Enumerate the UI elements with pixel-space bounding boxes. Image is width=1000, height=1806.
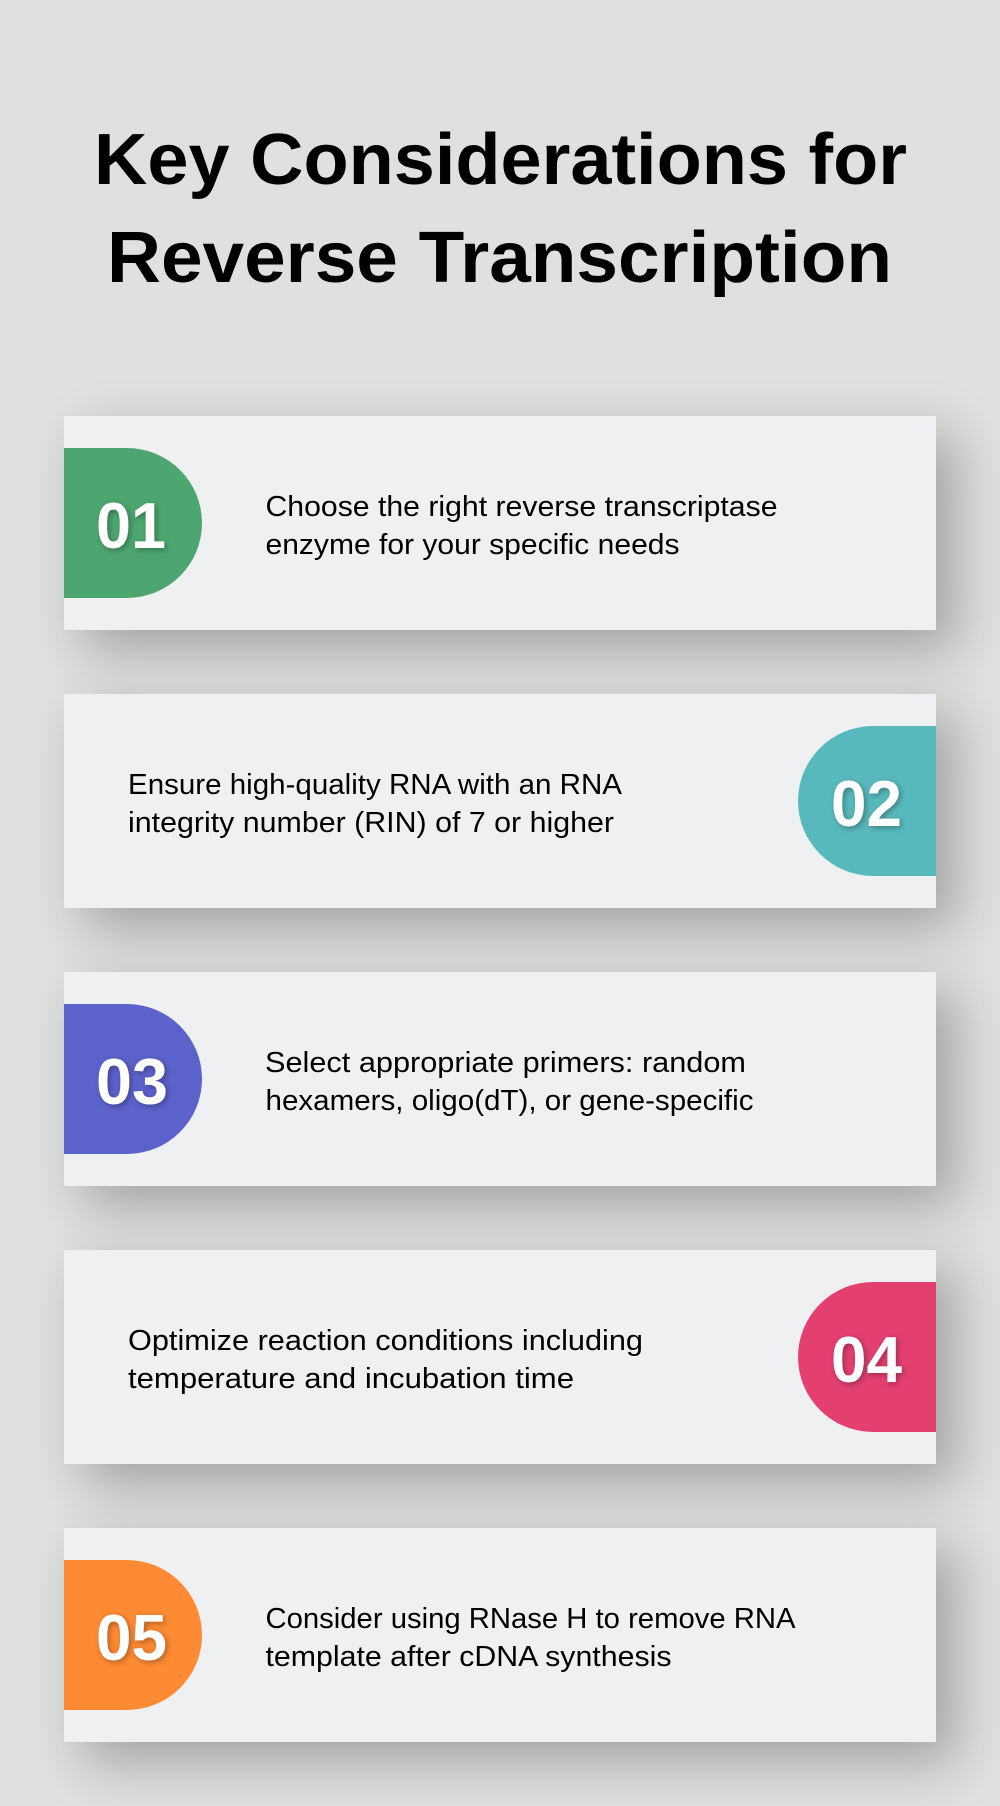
number 05: 05	[96, 1601, 167, 1674]
badge: 01	[64, 448, 202, 598]
badge: 05	[64, 1560, 202, 1710]
panel: step 04	[64, 1250, 936, 1464]
number 02: 02	[831, 767, 902, 840]
title: Key Considerations for	[94, 120, 907, 200]
badge: 02	[798, 726, 936, 876]
badge: 03	[64, 1004, 202, 1154]
text: step 01: enzyme for your specific needs	[266, 529, 680, 561]
text: step 05: Consider using RNase H to remove RNA	[266, 1603, 796, 1635]
badge: 04	[798, 1282, 936, 1432]
text: step 03	[265, 1047, 754, 1117]
panel: step 01	[64, 416, 936, 630]
text: step 05	[266, 1603, 796, 1673]
title: Reverse Transcription	[107, 218, 892, 298]
number 01: 01	[96, 489, 166, 562]
number 03: 03	[96, 1045, 168, 1118]
text: step 02: Ensure high-quality RNA with an RNA	[128, 769, 623, 801]
text: step 04: temperature and incubation time	[128, 1363, 574, 1395]
text: step 03: hexamers, oligo(dT), or gene-specific	[266, 1085, 754, 1117]
text: step 02: integrity number (RIN) of 7 or higher	[128, 807, 614, 839]
panel: step 03	[64, 972, 936, 1186]
text: step 04	[128, 1325, 643, 1395]
text: step 01	[266, 491, 778, 561]
text: step 01: Choose the right reverse transcriptase	[266, 491, 778, 523]
panel: step 02	[64, 694, 936, 908]
text: step 02	[128, 769, 623, 839]
text: step 04: Optimize reaction conditions including	[128, 1325, 643, 1357]
text: step 05: template after cDNA synthesis	[266, 1641, 672, 1673]
text: step 03: Select appropriate primers: random	[265, 1047, 746, 1079]
number 04: 04	[831, 1323, 902, 1396]
panel: step 05	[64, 1528, 936, 1742]
title	[94, 120, 907, 298]
